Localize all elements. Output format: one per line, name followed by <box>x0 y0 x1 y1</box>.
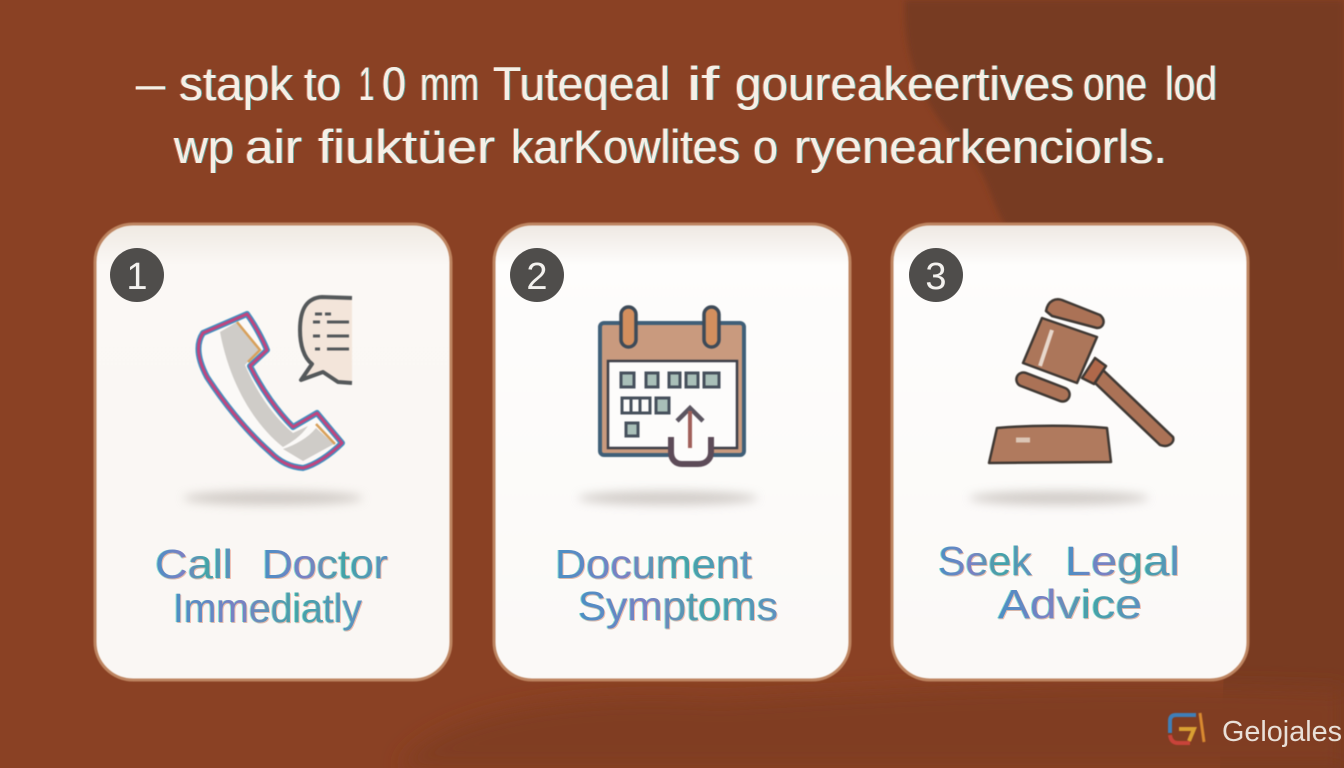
heading line 2: wp <box>173 120 234 173</box>
panel: step 3 seek legal advice <box>892 224 1248 680</box>
icon shadow <box>183 491 363 505</box>
label: document symptoms: Document <box>555 541 753 587</box>
card 3 background <box>892 224 1248 680</box>
badge 1: 1 <box>126 256 148 298</box>
icon shadow <box>969 491 1149 505</box>
heading line 2 <box>173 120 1167 173</box>
heading line 1 <box>136 57 1217 110</box>
heading line 1: lod <box>1165 57 1217 110</box>
heading line 1: Tuteqeal <box>493 57 670 110</box>
heading line 2: fiuktüer <box>318 120 495 173</box>
heading line 1: one <box>1083 57 1147 110</box>
card 1 background <box>95 224 451 680</box>
logo <box>1170 713 1342 748</box>
heading line 1: if <box>687 57 720 110</box>
logo wordmark: Gelojales <box>1222 716 1342 748</box>
label: seek legal advice <box>938 538 1180 627</box>
title heading <box>136 57 1217 173</box>
label: call doctor immediatly: Call <box>155 541 233 587</box>
label: seek legal advice: Seek <box>938 538 1033 584</box>
label: seek legal advice: Advice <box>998 581 1142 627</box>
heading line 1: to <box>304 57 341 110</box>
icon shadow <box>578 491 758 505</box>
heading line 1: 0 <box>382 57 406 110</box>
heading line 1: goureakeertives <box>735 57 1074 110</box>
label: document symptoms <box>555 541 778 629</box>
heading line 1: stapk <box>179 57 293 110</box>
heading line 2: ryenearkenciorls. <box>794 120 1167 173</box>
heading line 2: o <box>753 120 778 173</box>
heading line 1: mm <box>420 57 479 110</box>
badge 2: 2 <box>526 256 548 298</box>
panel: step 1 call doctor <box>95 224 451 680</box>
badge 2 <box>510 248 564 302</box>
icon: logo mark <box>1170 713 1204 743</box>
label: seek legal advice: Legal <box>1065 538 1180 584</box>
icon: calendar <box>600 307 744 464</box>
icon: speech bubble <box>300 297 352 383</box>
panel: step 2 document symptoms <box>494 224 850 680</box>
label: call doctor immediatly: Immediatly <box>173 585 362 631</box>
card 2 background <box>494 224 850 680</box>
icon: telephone handset <box>198 314 342 468</box>
label: call doctor immediatly <box>155 541 388 631</box>
icon: gavel <box>989 299 1173 463</box>
heading line 1: 1 <box>359 57 374 110</box>
heading line 2: karKowlites <box>511 120 740 173</box>
heading line 1: – <box>136 57 166 110</box>
heading line 2: air <box>245 120 302 173</box>
badge 1 <box>110 248 164 302</box>
label: document symptoms: Symptoms <box>578 583 778 629</box>
badge 3 <box>909 248 963 302</box>
label: call doctor immediatly: Doctor <box>262 541 388 587</box>
badge 3: 3 <box>925 256 947 298</box>
